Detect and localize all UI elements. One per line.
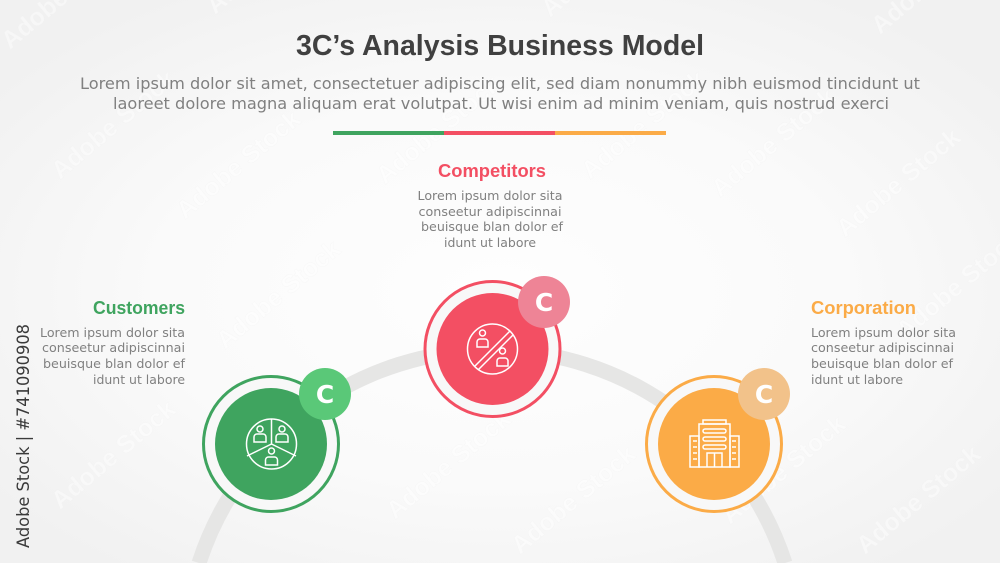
arc: [199, 350, 785, 563]
text: Adobe Stock: [716, 410, 851, 530]
customers text: idunt ut labore: [93, 373, 185, 387]
customers text: conseetur adipiscinnai: [42, 341, 185, 355]
icon: no competitors: [468, 324, 518, 374]
customers ring: [204, 376, 338, 512]
corporation text: idunt ut labore: [811, 373, 903, 387]
text: Adobe Stock: [381, 405, 516, 525]
text: Adobe Stock: [46, 65, 181, 185]
intro text: Lorem ipsum dolor sit amet, consectetuer adipiscing elit, sed diam nonummy nibh euismod tincidunt ut: [80, 74, 920, 93]
competitors text: [418, 189, 564, 250]
competitors text: beuisque blan dolor ef: [421, 220, 564, 234]
text: Adobe Stock: [576, 65, 711, 185]
text: Adobe Stock: [46, 395, 181, 515]
icon: customer segments: [246, 419, 296, 469]
customers text: [40, 326, 186, 387]
competitors text: idunt ut labore: [444, 236, 536, 250]
customers text: beuisque blan dolor ef: [43, 357, 186, 371]
corporation badge: [738, 368, 790, 420]
customers heading: Customers: [93, 298, 185, 318]
text: Adobe Stock: [506, 440, 641, 560]
competitors disc: [436, 293, 548, 405]
corporation badge: C: [755, 380, 773, 409]
corporation text: [811, 326, 956, 387]
text: Adobe Stock: [371, 70, 506, 190]
corporation disc: [658, 388, 770, 500]
competitors ring: [425, 282, 560, 416]
intro text: laoreet dolore magna aliquam erat volutpat. Ut wisi enim ad minim veniam, quis nostrud exerci: [113, 94, 889, 113]
competitors heading: Competitors: [438, 161, 546, 181]
customers badge: C: [316, 380, 334, 409]
corporation heading: Corporation: [811, 298, 916, 318]
corporation text: Lorem ipsum dolor sita: [811, 326, 956, 340]
title: 3C’s Analysis Business Model: [296, 30, 704, 62]
customers text: Lorem ipsum dolor sita: [40, 326, 185, 340]
text: Adobe Stock: [831, 123, 966, 243]
tri-colour divider: [333, 131, 666, 135]
text: Adobe Stock: [706, 83, 841, 203]
corporation text: conseetur adipiscinnai: [811, 341, 954, 355]
customers disc: [215, 388, 327, 500]
corporation ring: [646, 376, 782, 512]
text: Adobe Stock: [171, 105, 306, 225]
panel: customers: [40, 298, 351, 512]
corporation text: beuisque blan dolor ef: [811, 357, 954, 371]
panel: competitors: [418, 161, 570, 416]
customers badge: [299, 368, 351, 420]
competitors text: conseetur adipiscinnai: [418, 205, 562, 219]
competitors text: Lorem ipsum dolor sita: [418, 189, 562, 203]
text: Adobe Stock: [211, 235, 346, 355]
panel: corporation: [646, 298, 956, 512]
stock credit: Adobe Stock | #741090908: [14, 324, 34, 548]
text: Adobe Stock: [851, 440, 986, 560]
intro text: [80, 74, 920, 113]
competitors badge: C: [535, 288, 553, 317]
competitors badge: [518, 276, 570, 328]
icon: office building: [690, 420, 739, 467]
